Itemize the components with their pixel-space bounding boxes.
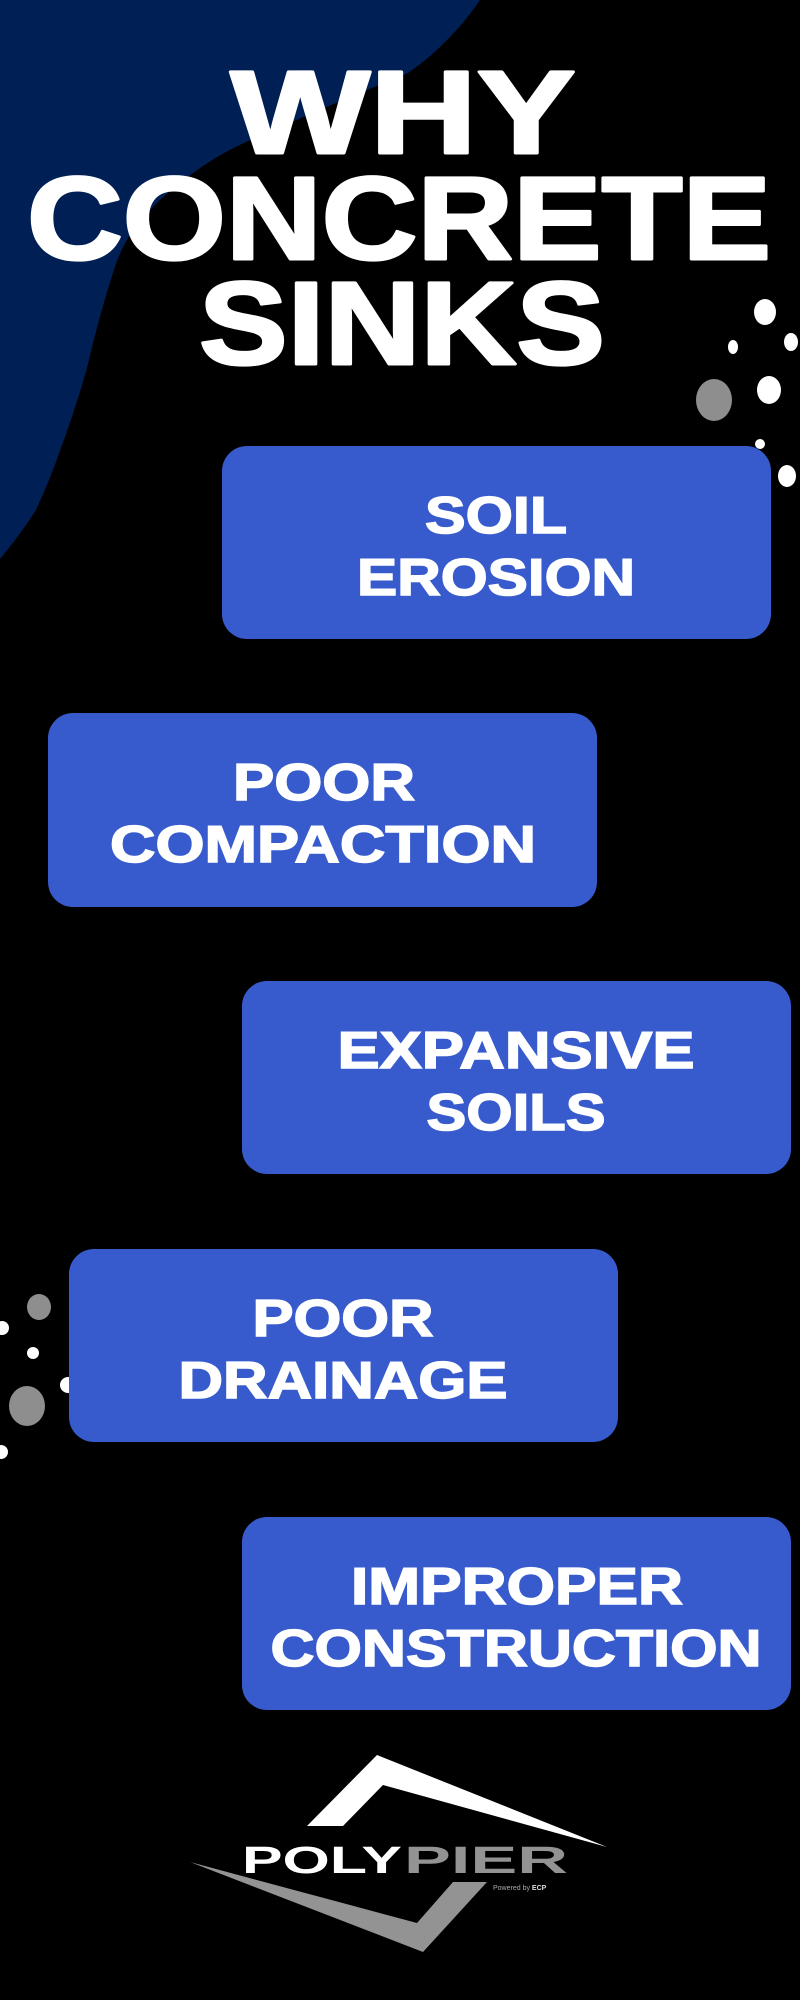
panel: expansive soils: SOILS <box>426 1084 606 1142</box>
panel: improper construction <box>242 1517 791 1710</box>
panel: expansive soils <box>242 981 791 1174</box>
logo: polypier: PIER <box>404 1840 568 1882</box>
panel: soil erosion <box>222 446 771 639</box>
title: CONCRETE <box>27 153 771 285</box>
decorative dots right <box>696 299 798 487</box>
logo: polypier: POLY <box>242 1840 402 1882</box>
panel: soil erosion: EROSION <box>357 549 635 607</box>
panel: poor drainage: DRAINAGE <box>178 1352 508 1410</box>
title <box>27 47 771 390</box>
panel: poor drainage <box>69 1249 618 1442</box>
decorative dots left <box>0 1294 76 1459</box>
panel: improper construction: IMPROPER <box>351 1558 683 1616</box>
panel: poor compaction: POOR <box>233 754 415 812</box>
logo: polypier <box>190 1755 607 1952</box>
logo: polypier: Powered by ECP <box>493 1885 547 1892</box>
panel: poor compaction <box>48 713 597 907</box>
panel: expansive soils: EXPANSIVE <box>338 1022 694 1080</box>
panel: poor drainage: POOR <box>252 1290 434 1348</box>
panel: soil erosion: SOIL <box>425 487 567 545</box>
title: SINKS <box>199 258 605 390</box>
panel: poor compaction: COMPACTION <box>110 816 536 874</box>
panel: improper construction: CONSTRUCTION <box>270 1620 762 1678</box>
title: WHY <box>230 47 576 179</box>
background blob: navy <box>0 0 480 559</box>
